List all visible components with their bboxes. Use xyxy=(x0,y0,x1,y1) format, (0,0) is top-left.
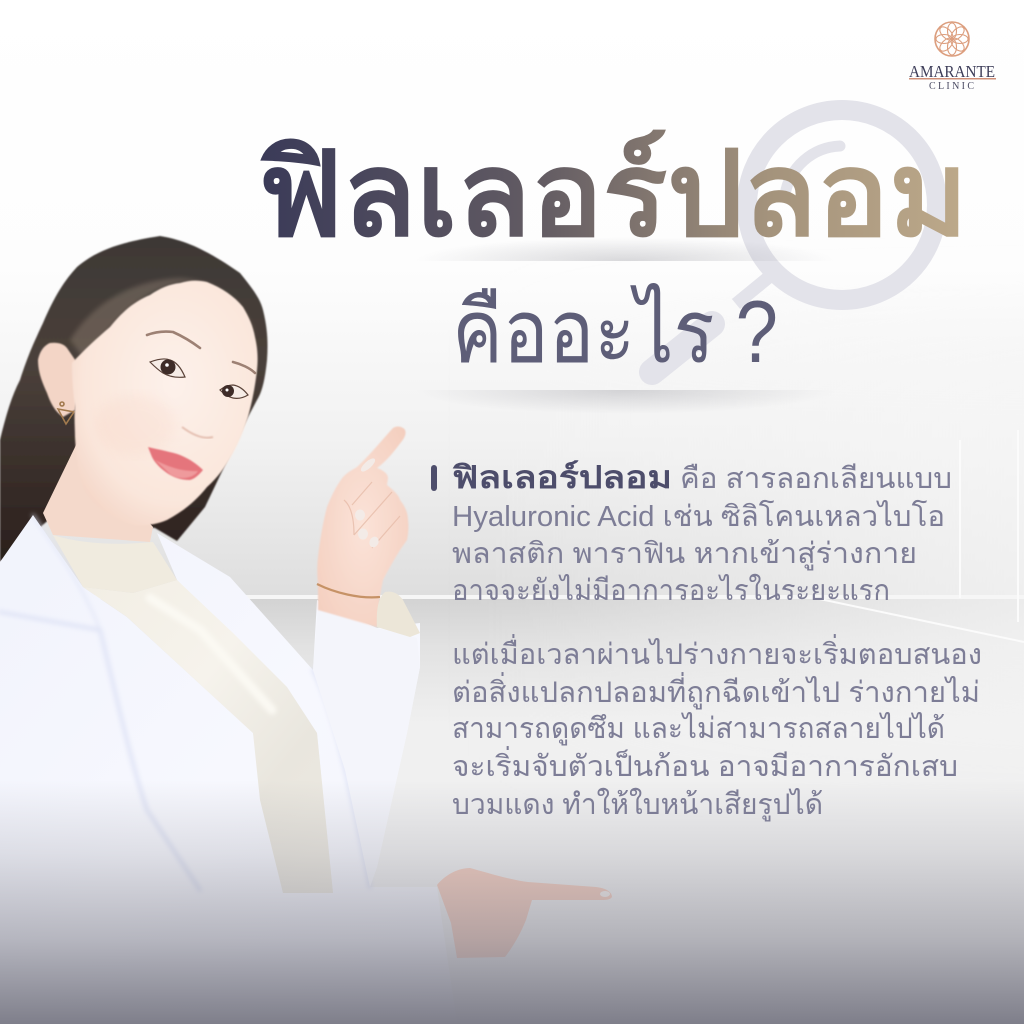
hair highlight xyxy=(70,278,258,360)
subtitle shadow xyxy=(465,390,784,408)
paragraph 2: แต่เมื่อเวลาผ่านไปร่างกายจะเริ่มตอบสนอง xyxy=(452,634,982,671)
earring xyxy=(58,402,74,424)
eyes xyxy=(150,359,248,398)
paragraph 1: อาจจะยังไม่มีอาการอะไรในระยะแรก xyxy=(452,573,890,607)
doctor illustration xyxy=(0,236,612,1024)
paragraph 2: บวมแดง ทำให้ใบหน้าเสียรูปได้ xyxy=(452,787,823,822)
lips xyxy=(148,447,203,480)
paragraph 2: สามารถดูดซึม และไม่สามารถสลายไปได้ xyxy=(452,711,945,746)
paragraph 1: ฟิลเลอร์ปลอม xyxy=(452,460,672,495)
coat xyxy=(0,515,457,1024)
body text xyxy=(431,460,982,822)
brand subtitle: CLINIC xyxy=(929,81,974,92)
fingertip nail xyxy=(600,891,610,897)
icon: magnifying glass watermark xyxy=(652,110,937,372)
bracelet xyxy=(317,584,380,597)
finger nails xyxy=(355,456,380,549)
paragraph 1: คือ สารลอกเลียนแบบ xyxy=(680,463,952,495)
lower hand xyxy=(437,868,612,958)
ear xyxy=(38,343,80,417)
raised hand xyxy=(317,426,408,627)
title shadow xyxy=(461,242,788,261)
paragraph 1 xyxy=(452,460,952,607)
finger creases xyxy=(344,482,400,548)
bottom fade xyxy=(0,780,1024,1024)
eyebrows xyxy=(147,332,255,373)
collar and lapel shading xyxy=(0,515,370,890)
paragraph 1: พลาสติก พาราฟิน หากเข้าสู่ร่างกาย xyxy=(452,538,917,571)
cuff lining xyxy=(377,592,420,637)
hair xyxy=(0,236,268,562)
paragraph 2: ต่อสิ่งแปลกปลอมที่ถูกฉีดเข้าไป ร่างกายไม่ xyxy=(452,672,980,710)
brand name: AMARANTE xyxy=(909,62,995,81)
icon: mandala emblem xyxy=(935,22,969,56)
logo: Amarante Clinic xyxy=(909,22,996,92)
cheek blush xyxy=(95,395,175,455)
subtitle: คืออะไร ? xyxy=(452,282,778,381)
nose xyxy=(182,427,213,438)
title: ฟิลเลอร์ปลอม xyxy=(258,129,968,261)
paragraph 2: จะเริ่มจับตัวเป็นก้อน อาจมีอาการอักเสบ xyxy=(452,746,958,783)
high collar xyxy=(53,535,177,593)
accent bar xyxy=(431,465,437,491)
paragraph 1: Hyaluronic Acid เช่น ซิลิโคนเหลวไบโอ xyxy=(452,499,945,533)
inner top xyxy=(83,580,333,893)
raised sleeve xyxy=(313,608,420,887)
satin highlight xyxy=(150,598,272,710)
neck xyxy=(43,443,153,542)
paragraph 2 xyxy=(452,634,982,822)
face xyxy=(72,281,258,525)
